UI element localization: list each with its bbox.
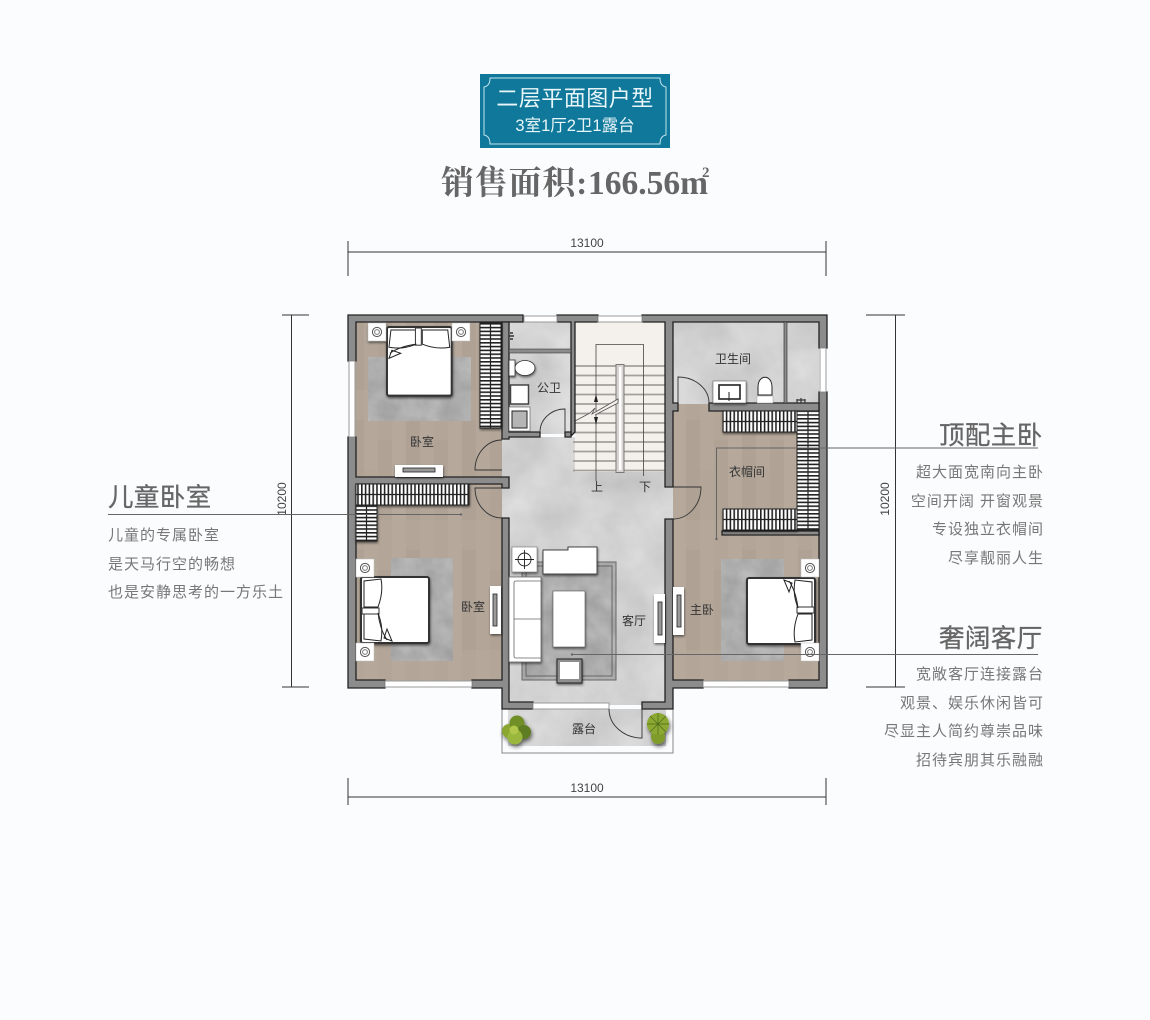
bed: top bedroom (368, 323, 452, 396)
callout: master bedroom: 超大面宽南向主卧 (916, 464, 1044, 481)
floor: master suite (673, 403, 823, 684)
armchair sofa (543, 547, 597, 574)
sales area heading: 166.56m (588, 165, 708, 202)
callout: children's bedroom: 儿童卧室 (108, 484, 212, 512)
nightstands: lower bedroom (356, 559, 374, 661)
wardrobe: closet lower (723, 509, 797, 530)
room labels: 衣帽间 (729, 464, 765, 479)
sink (713, 381, 746, 403)
shower head (797, 398, 805, 403)
wardrobe: top bedroom (480, 323, 501, 428)
sink (509, 407, 530, 431)
right dimension: 10200 (878, 482, 892, 516)
callout: master bedroom: 尽享靓丽人生 (948, 550, 1044, 567)
doors (475, 377, 709, 738)
floor: ensuite bathroom (673, 322, 819, 404)
callout: master bedroom: 专设独立衣帽间 (932, 521, 1044, 538)
floor plan (348, 315, 827, 753)
room labels (410, 352, 765, 736)
title badge (480, 74, 670, 148)
tv: living room (654, 594, 665, 643)
bed: lower bedroom (361, 577, 429, 643)
callout: master bedroom: 空间开阔 开窗观景 (911, 492, 1044, 510)
bed: master bedroom (747, 578, 815, 644)
room labels: 上 (591, 480, 603, 494)
title badge: 二层平面图户型 (496, 86, 654, 111)
room labels: 卫生间 (715, 352, 751, 366)
sales area heading: 2 (702, 165, 710, 181)
top dimension (348, 236, 826, 276)
callout: children's bedroom: 是天马行空的畅想 (108, 556, 236, 573)
callout: master bedroom (715, 422, 1044, 567)
tv: lower bedroom (490, 586, 501, 634)
sales area heading: 销售面积: (441, 165, 588, 202)
floor: bedroom top-left (352, 318, 502, 480)
rug: top bedroom (368, 357, 471, 421)
rug: lower bedroom (391, 558, 453, 661)
rug: master bedroom (721, 559, 784, 661)
room labels: 卧室 (461, 599, 485, 614)
right dimension (866, 315, 905, 687)
living room furniture (509, 547, 597, 683)
bottom dimension (348, 778, 826, 805)
room labels: 下 (639, 480, 651, 494)
wardrobe: lower bedroom short (356, 506, 377, 541)
public bathroom fixtures (509, 333, 535, 431)
callout: master bedroom: 顶配主卧 (939, 422, 1043, 450)
top dimension: 13100 (570, 236, 604, 250)
bottom dimension: 13100 (570, 781, 604, 795)
windows (349, 316, 826, 709)
callout: living room: 招待宾朋其乐融融 (916, 752, 1044, 769)
left dimension: 10200 (275, 482, 289, 516)
left dimension (275, 315, 309, 687)
room labels: 主卧 (690, 603, 714, 617)
plant: right (647, 713, 669, 744)
coffee table (553, 591, 585, 647)
floor: living room (502, 437, 673, 705)
shower head (509, 333, 514, 339)
tv: top bedroom (395, 465, 443, 477)
side table lamp (512, 547, 537, 572)
title badge: 3室1厅2卫1露台 (515, 116, 635, 135)
floor: bedroom bottom-left (352, 480, 502, 684)
sales area heading (441, 165, 710, 202)
callout: living room: 宽敞客厅连接露台 (916, 666, 1044, 683)
nightstand left (368, 323, 386, 341)
room labels: 客厅 (622, 613, 646, 628)
toilet (757, 377, 773, 403)
walls (348, 315, 827, 709)
room labels: 露台 (572, 721, 596, 736)
floor: terrace (508, 709, 666, 746)
wardrobe: lower bedroom long (356, 484, 469, 505)
staircase (573, 322, 665, 481)
callout: living room: 尽显主人简约尊崇品味 (884, 723, 1044, 740)
tv: master bedroom (673, 587, 684, 635)
ottoman (557, 659, 582, 683)
cabinet (510, 385, 528, 404)
callout: living room (571, 625, 1044, 769)
callout: children's bedroom (108, 484, 462, 601)
wardrobe: closet side (797, 411, 819, 530)
room labels: 卧室 (410, 434, 434, 449)
toilet (509, 360, 535, 376)
nightstands: master bedroom (801, 559, 819, 661)
ensuite fixtures (713, 377, 805, 403)
callout: children's bedroom: 也是安静思考的一方乐土 (108, 584, 284, 601)
floor: public bathroom (509, 322, 571, 434)
terrace outline (502, 709, 673, 753)
room labels: 公卫 (537, 381, 561, 395)
main sofa (509, 577, 541, 662)
wardrobe: closet upper (723, 411, 797, 432)
callout: living room: 观景、娱乐休闲皆可 (900, 695, 1044, 712)
rug: living room (522, 562, 616, 680)
callout: children's bedroom: 儿童的专属卧室 (108, 526, 220, 544)
nightstand right (452, 323, 470, 341)
plant: left (502, 716, 531, 744)
callout: living room: 奢阔客厅 (939, 625, 1043, 653)
